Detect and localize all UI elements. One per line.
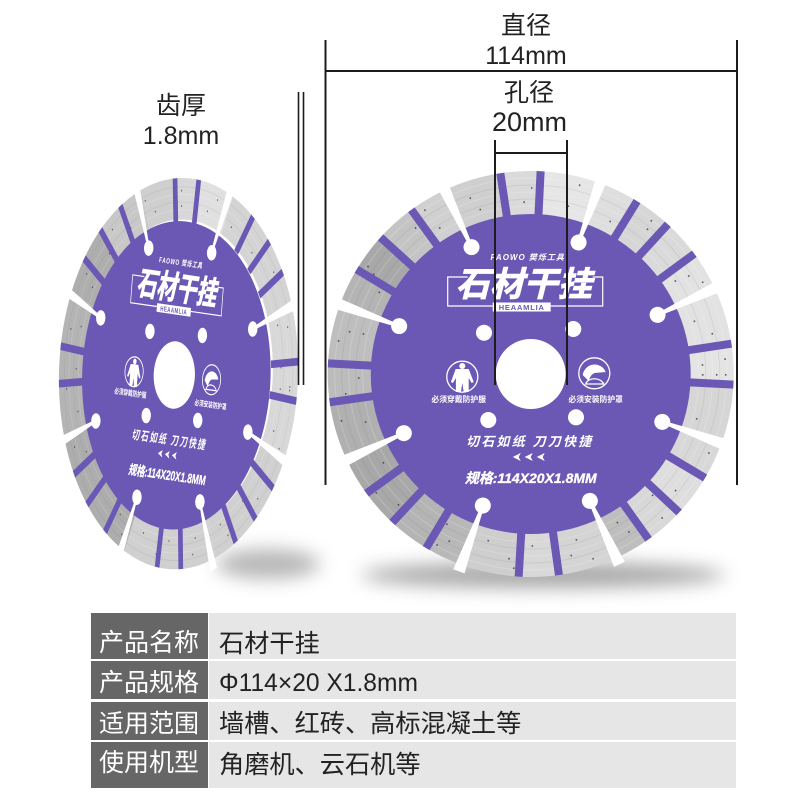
spec table: [91, 613, 736, 788]
subtitle tag: HEAAMLIA: [499, 303, 545, 312]
label: diameter: [485, 12, 567, 70]
label: diameter: 直径: [501, 12, 551, 40]
row: applicable range: 墙槽、红砖、高标混凝土等: [219, 710, 521, 738]
spec text: 规格:114X20X1.8MM: [465, 470, 597, 486]
row: product name: 石材干挂: [219, 630, 320, 658]
centre arbor hole: [151, 338, 197, 412]
row: product spec: 产品规格: [99, 669, 199, 697]
icon caption: protective suit: 必须穿戴防护服: [114, 386, 147, 401]
icon: blade guard: [579, 358, 610, 389]
brand line: FAOWO 樊烁工具: [490, 253, 565, 262]
icon caption: blade guard: 必须安装防护罩: [568, 394, 623, 404]
icon: protective suit: [124, 356, 144, 388]
row: applicable range: 适用范围: [99, 710, 199, 738]
slogan: 切石如纸 刀刀快捷: [131, 428, 207, 453]
title frame: [131, 275, 223, 316]
subtitle tag: HEAAMLIA: [160, 306, 187, 317]
label: tooth thickness: 齿厚: [156, 92, 206, 120]
row: product name: 产品名称: [99, 629, 199, 657]
icon: protective suit: [447, 361, 478, 392]
thickness dimension lines: [298, 92, 304, 385]
title: 石材干挂: [135, 264, 220, 313]
white expansion slots: [40, 161, 309, 589]
white expansion slots: [331, 174, 731, 574]
centre arbor hole: [496, 339, 566, 409]
arrows: [513, 453, 545, 461]
large blade (front view): [274, 117, 787, 631]
label: diameter: 114mm: [485, 42, 567, 70]
row: compatible machines: 使用机型: [99, 749, 199, 777]
title frame: [448, 277, 603, 306]
purple segment stripes: [45, 162, 312, 586]
label: tooth thickness: 1.8mm: [143, 122, 219, 150]
row: applicable range: [91, 702, 736, 740]
purple centre plate: [371, 214, 691, 534]
blade segments ring: [10, 106, 347, 642]
row: compatible machines: [91, 742, 736, 788]
icon caption: blade guard: 必须安装防护罩: [194, 398, 227, 412]
row: compatible machines: 角磨机、云石机等: [219, 751, 420, 779]
title: 石材干挂: [456, 266, 596, 304]
icon caption: protective suit: 必须穿戴防护服: [431, 394, 486, 404]
subtitle tag: [156, 303, 191, 318]
blade segments ring: [274, 117, 787, 631]
purple centre plate: [71, 208, 281, 542]
row: product spec: Φ114×20 X1.8mm: [219, 670, 418, 697]
shadow: small disc: [216, 549, 320, 579]
slogan: 切石如纸 刀刀快捷: [466, 434, 593, 449]
icon: blade guard: [201, 364, 222, 396]
arrows: [158, 449, 177, 460]
label: bore: 孔径: [504, 79, 554, 107]
bore dimension lines: [495, 140, 567, 385]
spec text: 规格:114X20X1.8MM: [128, 462, 207, 489]
purple segment stripes: [328, 171, 734, 577]
row: product name: [91, 613, 736, 659]
diameter dimension lines: [325, 40, 737, 485]
small blade (angled view): [10, 106, 347, 642]
shadow: large disc: [361, 562, 725, 588]
four small holes: [476, 321, 584, 428]
row: product spec: [91, 661, 736, 699]
brand line: FAOWO 樊烁工具: [159, 255, 203, 271]
four small holes: [138, 319, 209, 431]
label: bore: 20mm: [492, 107, 567, 137]
label: tooth thickness: [143, 92, 219, 150]
label: bore: [492, 79, 567, 137]
